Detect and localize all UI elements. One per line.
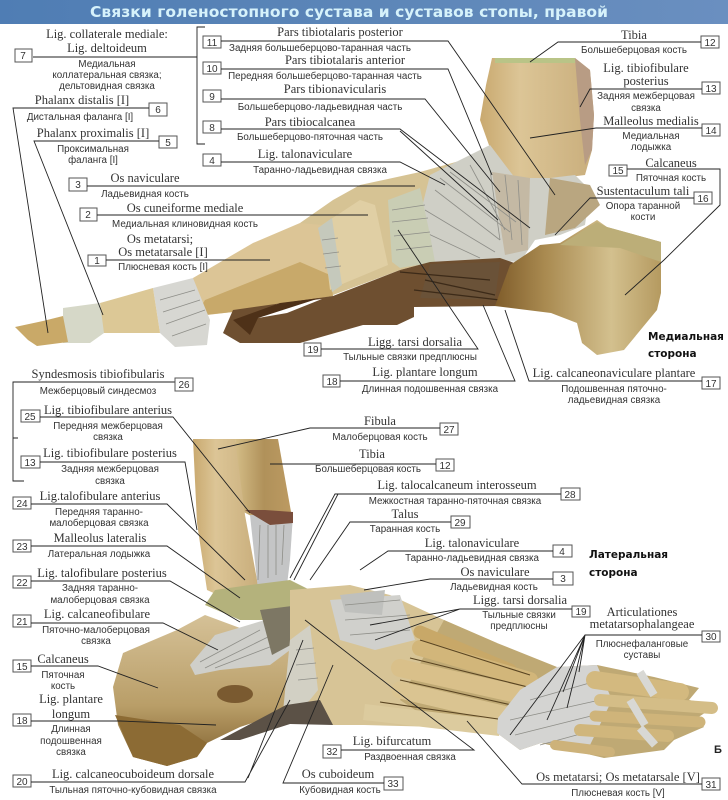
label 7: коллатеральная связка; bbox=[52, 70, 162, 81]
label 25: Передняя межберцовая bbox=[53, 421, 163, 432]
label 29: 29 bbox=[454, 518, 466, 529]
label 10: Передняя большеберцово-таранная часть bbox=[228, 71, 422, 82]
label 24: 24 bbox=[16, 499, 28, 510]
label 9 bbox=[203, 82, 500, 192]
label 1 upper: Os metatarsi; bbox=[127, 232, 193, 246]
label 27: Малоберцовая кость bbox=[332, 432, 428, 443]
label 15 lower: Calcaneus bbox=[37, 652, 89, 666]
label 14 upper: лодыжка bbox=[631, 142, 672, 153]
label 3 lower: Ладьевидная кость bbox=[450, 582, 538, 593]
label 31: Os metatarsi; Os metatarsale [V] bbox=[536, 770, 700, 784]
label 5: Проксимальная bbox=[57, 144, 129, 155]
label 20: 20 bbox=[16, 777, 28, 788]
label 14 upper: Медиальная bbox=[622, 131, 680, 142]
label 23: Malleolus lateralis bbox=[54, 531, 146, 545]
label 31: 31 bbox=[705, 780, 717, 791]
label 16: 16 bbox=[697, 194, 709, 205]
deltoid ligaments bbox=[412, 145, 600, 262]
first metatarsal bbox=[190, 223, 333, 317]
label 12 upper: Tibia bbox=[621, 28, 647, 42]
label 13 lower: 13 bbox=[24, 458, 36, 469]
label 18 lower bbox=[13, 692, 216, 758]
label 18 lower: Длинная bbox=[51, 724, 91, 735]
label 18 upper: Длинная подошвенная связка bbox=[362, 384, 499, 395]
label 19 lower bbox=[370, 593, 590, 640]
label 18 upper: Lig. plantare longum bbox=[372, 365, 478, 379]
label 21: Lig. calcaneofibulare bbox=[44, 607, 151, 621]
label 18 upper: 18 bbox=[326, 377, 338, 388]
label 7: 7 bbox=[20, 51, 26, 62]
label 33 bbox=[283, 665, 403, 796]
label 6 bbox=[13, 93, 167, 333]
label 27: Fibula bbox=[364, 414, 396, 428]
label 10: Pars tibiotalaris anterior bbox=[285, 53, 406, 67]
label 10 bbox=[203, 53, 492, 175]
label 23 bbox=[13, 531, 240, 598]
label 8: 8 bbox=[209, 123, 215, 134]
label 16: Sustentaculum tali bbox=[597, 184, 690, 198]
toes bbox=[555, 672, 712, 752]
label 30: 30 bbox=[705, 632, 717, 643]
label 24: Передняя таранно- bbox=[55, 507, 143, 518]
calcaneus bbox=[113, 615, 322, 766]
label 9: 9 bbox=[209, 92, 215, 103]
label 29 bbox=[310, 507, 470, 580]
heading: lateral side: сторона bbox=[589, 567, 638, 579]
label 22: Задняя таранно- bbox=[62, 583, 138, 594]
label 7: Lig. deltoideum bbox=[67, 41, 147, 55]
label 5: фаланга [I] bbox=[68, 155, 118, 166]
label 4 upper: Таранно-ладьевидная связка bbox=[253, 165, 387, 176]
label 21: 21 bbox=[16, 617, 28, 628]
label 22: Lig. talofibulare posterius bbox=[37, 566, 167, 580]
label 12 upper: 12 bbox=[704, 38, 716, 49]
label 28: 28 bbox=[564, 490, 576, 501]
label 19 lower: 19 bbox=[575, 607, 587, 618]
label 29: Таранная кость bbox=[370, 524, 440, 535]
heading: medial side: Медиальная bbox=[648, 331, 724, 343]
label 26: Syndesmosis tibiofibularis bbox=[32, 367, 165, 381]
label 19 upper: 19 bbox=[307, 345, 319, 356]
label 4 lower: 4 bbox=[559, 547, 565, 558]
label 13 lower: Lig. tibiofibulare posterius bbox=[43, 446, 177, 460]
label 21 bbox=[13, 607, 218, 650]
midfoot bones bbox=[300, 158, 520, 295]
label 23: 23 bbox=[16, 542, 28, 553]
label 33: Кубовидная кость bbox=[299, 785, 381, 796]
label 22 bbox=[13, 566, 240, 622]
label 30: Articulationes bbox=[607, 605, 678, 619]
label 5 bbox=[34, 126, 177, 315]
label 11 bbox=[203, 25, 555, 195]
label 21: связка bbox=[81, 636, 111, 647]
label 15 lower: 15 bbox=[16, 662, 28, 673]
label 32: Раздвоенная связка bbox=[364, 752, 456, 763]
label 4 upper: Lig. talonaviculare bbox=[258, 147, 353, 161]
label 33: 33 bbox=[387, 779, 399, 790]
metatarsals bbox=[364, 632, 540, 728]
label 2 upper: Os cuneiforme mediale bbox=[127, 201, 244, 215]
label 29: Talus bbox=[392, 507, 419, 521]
heading: lateral side: Латеральная bbox=[589, 549, 668, 561]
panel marker Б: Б bbox=[714, 744, 722, 756]
label 25: Lig. tibiofibulare anterius bbox=[44, 403, 172, 417]
label 4 lower: Таранно-ладьевидная связка bbox=[405, 553, 539, 564]
cuneiform patch bbox=[322, 200, 388, 290]
label 20: Lig. calcaneocuboideum dorsale bbox=[52, 767, 214, 781]
label 25: связка bbox=[93, 432, 123, 443]
label 30: metatarsophalangeae bbox=[590, 617, 695, 631]
title bar bbox=[0, 0, 728, 24]
label 15 upper bbox=[609, 156, 720, 295]
label 17 bbox=[505, 310, 720, 406]
label 33: Os cuboideum bbox=[302, 767, 375, 781]
label 31: Плюсневая кость [V] bbox=[571, 788, 665, 799]
fibula bbox=[193, 439, 258, 605]
label 7: Медиальная bbox=[78, 59, 136, 70]
label 3 lower: 3 bbox=[560, 574, 566, 585]
label 24: Lig.talofibulare anterius bbox=[40, 489, 161, 503]
label 1 upper: 1 bbox=[94, 256, 100, 267]
medial foot illustration bbox=[15, 58, 661, 355]
label 32: 32 bbox=[326, 747, 338, 758]
heading: lateral side bbox=[589, 549, 668, 579]
label 1 upper: Плюсневая кость [I] bbox=[118, 262, 208, 273]
label 17: 17 bbox=[705, 379, 717, 390]
label 4 upper: 4 bbox=[209, 156, 215, 167]
label 19 upper: Ligg. tarsi dorsalia bbox=[368, 335, 462, 349]
label 13 upper: Lig. tibiofibulare bbox=[603, 61, 689, 75]
label 6: Дистальная фаланга [I] bbox=[27, 112, 133, 123]
tibiofibular ligaments bbox=[245, 510, 293, 590]
label 8 bbox=[203, 115, 530, 228]
bracket: syndesmosis bbox=[13, 382, 175, 481]
label 15 lower bbox=[13, 652, 158, 692]
label 27 bbox=[218, 414, 458, 449]
label 26 bbox=[32, 367, 193, 397]
label 16: кости bbox=[631, 212, 655, 223]
calcaneus bbox=[495, 220, 661, 355]
label 3 upper bbox=[69, 171, 415, 200]
plantar ligaments bbox=[223, 258, 520, 343]
label 24 bbox=[13, 489, 245, 580]
lateral foot illustration bbox=[113, 439, 717, 766]
label 22: малоберцовая связка bbox=[50, 595, 150, 606]
label 15 lower: Пяточная bbox=[41, 670, 85, 681]
label 19 lower: предплюсны bbox=[490, 621, 548, 632]
label 32: Lig. bifurcatum bbox=[353, 734, 431, 748]
label 11: Задняя большеберцово-таранная часть bbox=[229, 43, 411, 54]
label 1 upper bbox=[88, 232, 270, 273]
label 2 upper: Медиальная клиновидная кость bbox=[112, 219, 258, 230]
label 14 upper bbox=[530, 114, 720, 153]
label 10: 10 bbox=[206, 64, 218, 75]
label 12 lower: 12 bbox=[439, 461, 451, 472]
label 7 bbox=[15, 27, 168, 92]
label 28 bbox=[290, 478, 580, 580]
label 15 upper: Пяточная кость bbox=[636, 173, 706, 184]
label 30: суставы bbox=[624, 650, 660, 661]
label 9: Pars tibionavicularis bbox=[284, 82, 386, 96]
lateral ligaments bbox=[190, 580, 310, 675]
label 11: Pars tibiotalaris posterior bbox=[277, 25, 404, 39]
label 30 bbox=[510, 605, 720, 735]
tarsal bones bbox=[290, 585, 497, 733]
tibia and medial malleolus bbox=[480, 58, 594, 180]
forefoot ligaments bbox=[497, 665, 612, 750]
label 12 lower: Tibia bbox=[359, 447, 385, 461]
label 23: Латеральная лодыжка bbox=[48, 549, 151, 560]
label 4 lower bbox=[360, 536, 572, 570]
heading: medial side bbox=[648, 331, 724, 360]
label 27: 27 bbox=[443, 425, 455, 436]
label 6: Phalanx distalis [I] bbox=[35, 93, 129, 107]
label 20 bbox=[13, 640, 303, 796]
label 7: Lig. collaterale mediale: bbox=[46, 27, 168, 41]
label 18 upper bbox=[323, 305, 515, 395]
label 1 upper: Os metatarsale [I] bbox=[118, 245, 208, 259]
label 12 lower: Большеберцовая кость bbox=[315, 464, 421, 475]
label 2 upper: 2 bbox=[85, 210, 91, 221]
label 20: Тыльная пяточно-кубовидная связка bbox=[49, 785, 217, 796]
label 15 upper: Calcaneus bbox=[645, 156, 697, 170]
label 14 upper: 14 bbox=[705, 126, 717, 137]
label 12 upper bbox=[530, 28, 719, 62]
label 13 upper: связка bbox=[631, 103, 661, 114]
label 4 upper bbox=[203, 147, 445, 185]
forefoot base bbox=[400, 620, 717, 758]
label 17: ладьевидная связка bbox=[568, 395, 661, 406]
label 3 lower: Os naviculare bbox=[460, 565, 530, 579]
label 31 bbox=[467, 721, 720, 799]
label 18 lower: связка bbox=[56, 747, 86, 758]
label 22: 22 bbox=[16, 578, 28, 589]
label 28: Межкостная таранно-пяточная связка bbox=[369, 496, 542, 507]
label 2 upper bbox=[80, 201, 368, 230]
label 25 bbox=[21, 403, 250, 513]
label 5: Phalanx proximalis [I] bbox=[37, 126, 149, 140]
label 18 lower: Lig. plantare bbox=[39, 692, 103, 706]
label 14 upper: Malleolus medialis bbox=[603, 114, 699, 128]
label 17: Lig. calcaneonaviculare plantare bbox=[533, 366, 696, 380]
label 17: Подошвенная пяточно- bbox=[561, 384, 667, 395]
label 3 upper: Os naviculare bbox=[110, 171, 180, 185]
label 21: Пяточно-малоберцовая bbox=[42, 625, 150, 636]
label 6: 6 bbox=[155, 105, 161, 116]
label 4 lower: Lig. talonaviculare bbox=[425, 536, 520, 550]
label 13 lower: Задняя межберцовая bbox=[61, 464, 159, 475]
heading: medial side: сторона bbox=[648, 348, 697, 360]
label 16 bbox=[555, 184, 712, 235]
label 19 upper bbox=[304, 230, 478, 363]
label 13 lower: связка bbox=[95, 476, 125, 487]
label 19 lower: Тыльные связки bbox=[482, 610, 556, 621]
interphalangeal ligaments and distal phalanx bbox=[15, 303, 104, 346]
tibia bbox=[235, 439, 293, 523]
label 24: малоберцовая связка bbox=[49, 518, 149, 529]
label 13 upper: posterius bbox=[623, 74, 669, 88]
label 28: Lig. talocalcaneum interosseum bbox=[377, 478, 537, 492]
label 11: 11 bbox=[207, 38, 218, 49]
label 25: 25 bbox=[24, 412, 36, 423]
cuboid and tarsal ligaments bbox=[220, 590, 415, 740]
label 15 lower: кость bbox=[51, 681, 75, 692]
label 13 upper: 13 bbox=[705, 84, 717, 95]
label 19 lower: Ligg. tarsi dorsalia bbox=[473, 593, 567, 607]
label 7: дельтовидная связка bbox=[59, 81, 155, 92]
label 18 lower: 18 bbox=[16, 716, 28, 727]
label 15 upper: 15 bbox=[612, 166, 624, 177]
label 18 lower: longum bbox=[52, 707, 90, 721]
label 13 lower bbox=[21, 446, 197, 530]
label 13 upper bbox=[580, 61, 720, 114]
proximal phalanx bbox=[100, 288, 160, 333]
label 3 upper: Ладьевидная кость bbox=[101, 189, 189, 200]
label 3 lower bbox=[364, 565, 573, 593]
label 18 lower: подошвенная bbox=[40, 736, 102, 747]
label 13 upper: Задняя межберцовая bbox=[597, 91, 695, 102]
bracket: deltoid parts bbox=[33, 27, 205, 144]
label 30: Плюснефаланговые bbox=[596, 639, 689, 650]
label 5: 5 bbox=[165, 138, 171, 149]
label 12 upper: Большеберцовая кость bbox=[581, 45, 687, 56]
title bar: Связки голеностопного сустава и суставов стопы, правой bbox=[90, 3, 608, 21]
label 9: Большеберцово-ладьевидная часть bbox=[238, 102, 402, 113]
label 26: Межберцовый синдесмоз bbox=[40, 386, 157, 397]
label 12 lower bbox=[270, 447, 454, 475]
label 16: Опора таранной bbox=[606, 201, 680, 212]
label 8: Pars tibiocalcanea bbox=[265, 115, 356, 129]
label 8: Большеберцово-пяточная часть bbox=[237, 132, 383, 143]
label 26: 26 bbox=[178, 380, 190, 391]
label 19 upper: Тыльные связки предплюсны bbox=[343, 352, 477, 363]
label 32 bbox=[305, 620, 474, 763]
metatarsophalangeal ligaments bbox=[153, 278, 210, 347]
label 3 upper: 3 bbox=[75, 180, 81, 191]
